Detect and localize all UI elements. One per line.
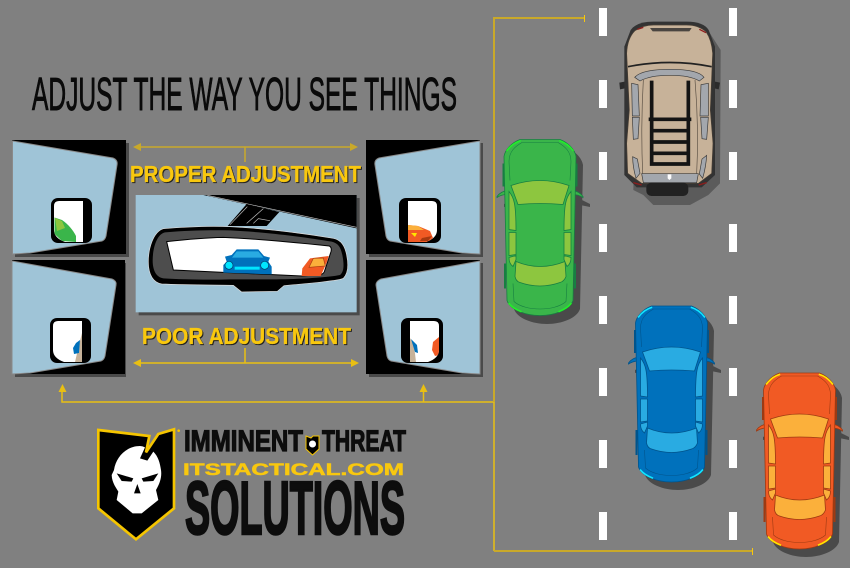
- blue car in rear-view mirror: [223, 249, 272, 274]
- proper adjustment arrow: [133, 143, 358, 162]
- roof rack ladder: [649, 81, 691, 164]
- heading: poor adjustment: POOR ADJUSTMENT: [142, 323, 351, 349]
- shadow: [633, 33, 721, 205]
- side windows: [632, 83, 708, 178]
- roof seams: [642, 80, 698, 173]
- hood seam: [628, 62, 712, 67]
- heading: proper adjustment: PROPER ADJUSTMENT: [130, 161, 361, 187]
- panel: bottom-left side mirror, poor adjustment: [12, 260, 126, 377]
- heading: poor adjustment: POOR ADJUSTMENT: [143, 324, 352, 350]
- panel: top-left side mirror, proper adjustment: [12, 140, 129, 257]
- body: [627, 25, 713, 183]
- wordmark: website: ITSTACTICAL.COM: [183, 461, 404, 479]
- car: tan SUV with roof rack: [619, 22, 721, 205]
- orange car seen in mirror: [408, 201, 437, 242]
- blue and tan cars at mirror edge: [53, 321, 82, 362]
- poor adjustment arrow: [133, 348, 359, 367]
- tan, blue and orange cars at mirror edges: [410, 321, 439, 362]
- connector line from side mirrors to cars: [58, 15, 752, 555]
- heading: proper adjustment: PROPER ADJUSTMENT: [131, 162, 362, 188]
- dark under-body: [624, 22, 715, 187]
- windshield: [635, 69, 704, 81]
- panel: top-right side mirror, proper adjustment: [366, 140, 483, 257]
- icon: skull shield: [98, 429, 180, 539]
- mirror glass: [167, 237, 331, 276]
- front grille slot: [650, 28, 692, 31]
- mirror stem: [228, 204, 279, 226]
- tail lights: [633, 27, 707, 185]
- mirrors: [619, 81, 720, 89]
- logo: ITS Tactical shield and wordmark: [98, 425, 406, 550]
- road lane markings: [599, 8, 737, 540]
- orange car in rear-view mirror: [302, 256, 329, 276]
- rear window with badge: [642, 174, 698, 183]
- mirror housing: [148, 226, 348, 292]
- icon: small skull shield: [306, 436, 319, 455]
- wordmark: imminent threat: IMMINENT: [184, 425, 303, 458]
- wordmark: threat: THREAT: [322, 425, 406, 458]
- wordmark: solutions: SOLUTIONS: [185, 466, 405, 550]
- spare tire: [646, 183, 688, 196]
- car: orange sedan: [756, 373, 849, 557]
- car: green sedan: [497, 140, 590, 324]
- panel: rear-view mirror: [136, 195, 360, 315]
- green car seen in mirror: [54, 201, 83, 242]
- car: blue sedan: [628, 306, 721, 490]
- panel: bottom-right side mirror, poor adjustment: [366, 260, 483, 377]
- title: ADJUST THE WAY YOU SEE THINGS: [32, 68, 457, 120]
